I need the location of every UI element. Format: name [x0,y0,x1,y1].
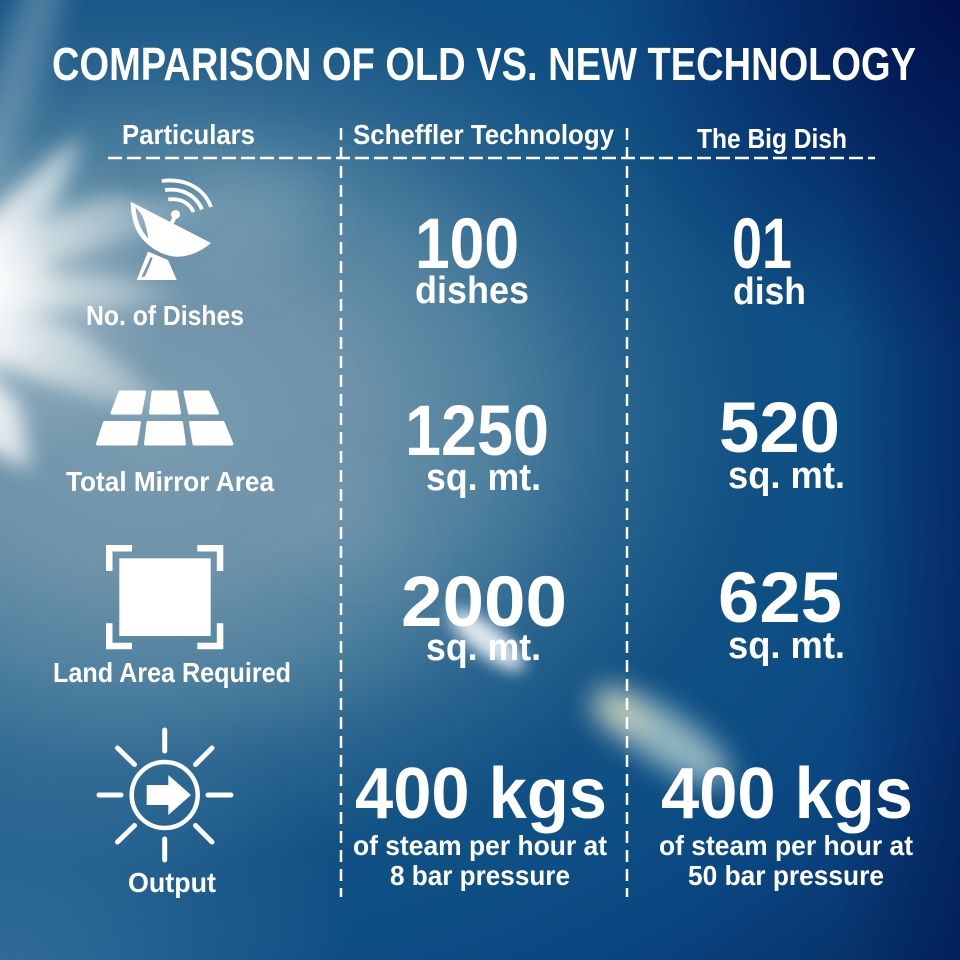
value: Big Dish mirror area: 520 [719,389,840,468]
value: Big Dish mirror area: sq. mt. [728,455,845,497]
value: Scheffler mirror area [405,392,549,499]
value: Big Dish mirror area [719,389,845,497]
value: Scheffler output: of steam per hour at [353,830,607,861]
column heading: The Big Dish: The Big Dish [697,123,847,154]
icon: satellite dish [131,180,211,280]
label: Land Area Required: Land Area Required [53,657,291,688]
value: Big Dish output: of steam per hour at [659,830,913,861]
value: Scheffler output: 400 kgs [355,754,607,834]
value: Big Dish land area [718,559,845,667]
value: Big Dish dishes: 01 [732,205,792,284]
label: Total Mirror Area: Total Mirror Area [66,466,274,497]
value: Scheffler land area: 2000 [401,563,567,642]
value: Scheffler mirror area: sq. mt. [426,457,541,499]
value: Big Dish output: 400 kgs [661,754,913,834]
label: No. of Dishes: No. of Dishes [86,300,244,331]
value: Scheffler dishes: dishes [415,270,529,312]
column heading: Particulars: Particulars [122,119,255,150]
column heading: Scheffler Technology: Scheffler Technology [353,119,614,150]
icon: mirror panels [98,392,232,444]
value: Scheffler output: 8 bar pressure [390,860,570,891]
label: Output: Output [128,867,216,898]
value: Scheffler mirror area: 1250 [405,392,549,471]
value: Scheffler output [353,754,607,891]
value: Big Dish dishes [732,205,806,313]
value: Scheffler dishes: 100 [415,205,519,284]
value: Big Dish output: 50 bar pressure [688,860,884,891]
value: Big Dish dishes: dish [733,271,806,313]
icon: land area square with corner brackets [106,545,223,649]
table grid: dashed lines [108,128,875,897]
value: Big Dish land area: sq. mt. [728,625,845,667]
value: Big Dish output [659,754,913,891]
value: Big Dish land area: 625 [718,559,842,638]
value: Scheffler land area: sq. mt. [426,627,541,669]
icon: sun with arrow [99,730,231,860]
